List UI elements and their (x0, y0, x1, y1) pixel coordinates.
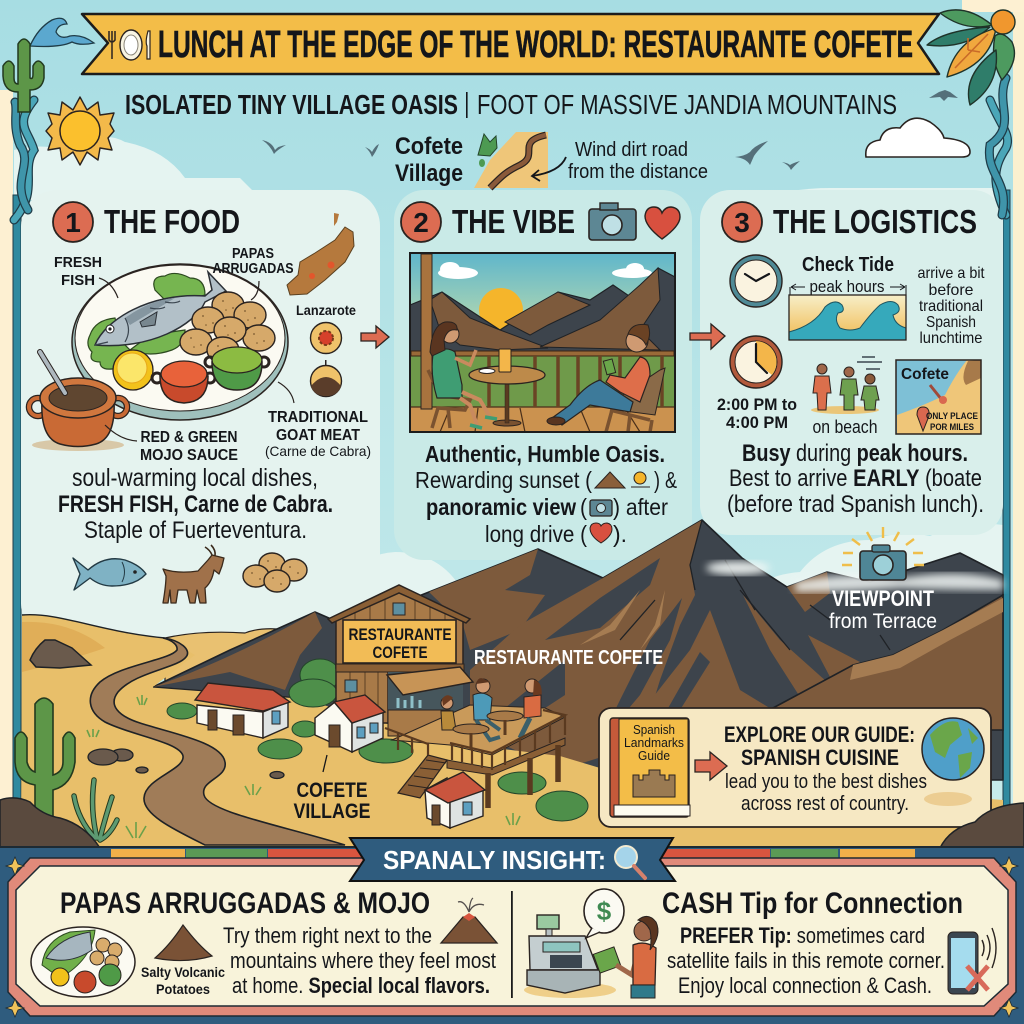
heading: the logistics (722, 202, 977, 242)
ribbon: spanaly insight (350, 838, 675, 881)
icon: birds (262, 90, 958, 170)
icon: camera (589, 203, 636, 240)
text: insight right body: Enjoy local connection & Cash. (678, 973, 932, 998)
icon: viewpoint camera (842, 527, 924, 580)
label: cofete village: COFETE (296, 779, 368, 802)
house 2 (315, 695, 385, 752)
icon: guide book: Spanish (633, 722, 675, 737)
icon: volcanic salt pile (155, 925, 212, 961)
illustration: tide waves (789, 295, 906, 340)
subtitle: ISOLATED TINY VILLAGE OASIS (125, 89, 458, 120)
heading: the food: 1 (65, 207, 81, 238)
label: viewpoint (829, 586, 937, 633)
icon: sun (46, 97, 114, 165)
icon: chili medallion (310, 322, 342, 354)
heading: cash tip: CASH Tip for Connection (662, 887, 963, 920)
icon: people on beach (811, 357, 882, 414)
location caption: Cofete Village: Village (395, 160, 463, 187)
icon: clock (730, 255, 782, 307)
text: vibe description: ( (580, 494, 587, 520)
guide text: lead you to the best dishes (725, 771, 927, 793)
guide text: EXPLORE OUR GUIDE: (724, 722, 915, 747)
text: arrive a bit: lunchtime (920, 330, 983, 347)
arrow: food to vibe (361, 326, 389, 348)
text: logistics description: Busy during peak hours. (742, 440, 968, 467)
restaurant building: COFETE (372, 643, 428, 662)
panel: explore our guide (599, 708, 991, 827)
text: vibe description: ) & (654, 467, 677, 493)
panel: the vibe background (394, 190, 692, 560)
label: cofete village (294, 755, 370, 823)
text: insight left body: at home. Special local flavors. (232, 973, 490, 998)
heading: the logistics: 3 (734, 207, 750, 238)
text: food description: FRESH FISH, Carne de Cabra. (58, 491, 333, 518)
illustration: map of Cofete: Cofete (901, 366, 949, 383)
insight frame (8, 858, 1016, 1016)
location caption: Cofete Village (395, 133, 463, 187)
panel: the food background (21, 190, 380, 640)
guide text: across rest of country. (741, 793, 909, 815)
label: salty volcanic potatoes: Potatoes (156, 981, 210, 997)
location caption: Cofete Village: Cofete (395, 133, 463, 160)
heading: the food: THE FOOD (104, 203, 240, 240)
house 1 (195, 683, 290, 738)
icon: cactus top left (3, 39, 44, 112)
rocks: mid left (88, 749, 284, 778)
caption: wind dirt road: Wind dirt road (575, 139, 688, 161)
text: vibe description: ) after (613, 494, 668, 520)
label: salty volcanic potatoes (141, 964, 225, 997)
panel: 2 the vibe (401, 202, 680, 547)
labels: food callouts: FRESH (54, 254, 102, 271)
illustration: restaurant and village (167, 585, 588, 828)
labels: food callouts: FISH (61, 272, 95, 289)
grass tufts (87, 695, 520, 838)
icon: cash register (524, 915, 616, 998)
labels: food callouts: (Carne de Cabra) (265, 443, 371, 459)
text: food description: soul-warming local dishes, (72, 464, 318, 492)
rock: left dune (30, 640, 91, 668)
background clouds (14, 137, 1003, 620)
text: vibe description: long drive ( (485, 521, 587, 547)
icon: guide book (610, 718, 690, 817)
heading: papas arrugadas: PAPAS ARRUGGADAS & MOJO (60, 887, 430, 920)
subtitle: FOOT OF MASSIVE JANDIA MOUNTAINS (477, 89, 897, 120)
text: vibe description: panoramic view (426, 494, 576, 520)
text: food description (58, 464, 333, 544)
arrow to road (532, 157, 566, 181)
text: vibe description: Rewarding sunset ( (415, 467, 592, 493)
icon: phone no signal (948, 928, 996, 994)
icon: inline sunset (595, 472, 650, 488)
labels: food callouts (54, 245, 371, 464)
icon: cloud top right (866, 118, 970, 157)
label: viewpoint: from Terrace (829, 610, 937, 633)
icon: guide book: Landmarks (624, 735, 684, 750)
heading: the vibe (401, 202, 575, 242)
icon: desert plant (74, 780, 117, 840)
title banner (82, 14, 939, 74)
label: time range (717, 395, 797, 432)
text: insight right body: satellite fails in this remote corner. (667, 948, 945, 973)
divider (511, 891, 513, 998)
labels: food callouts: TRADITIONAL (268, 409, 368, 426)
arrow: vibe to logistics (690, 324, 725, 349)
restaurant building: RESTAURANTE (348, 625, 452, 644)
text: insight left body: Try them right next to the (223, 923, 432, 948)
arrow: to guide text (695, 752, 727, 780)
illustration: plate of fish and potatoes (72, 264, 288, 420)
icon: fish (73, 558, 146, 590)
icon: speech bubble with dollar (584, 889, 624, 938)
icon: guide book: Guide (638, 748, 670, 763)
heading: the food (53, 202, 240, 242)
house 3 (425, 772, 485, 828)
icon: cactus bottom left (15, 698, 75, 818)
restaurant building (328, 585, 473, 736)
icon: winding road map (474, 132, 548, 188)
icon: potatoes (243, 553, 307, 592)
icon: inline camera (590, 500, 612, 516)
photo: terrace view at sunset (410, 253, 675, 432)
icon: speech bubble with dollar: $ (597, 896, 612, 926)
text: insight right body (667, 923, 945, 998)
icon: plate and cutlery (109, 30, 150, 60)
text: logistics description (727, 440, 984, 518)
text: vibe description (415, 441, 677, 547)
heading: the logistics: THE LOGISTICS (773, 203, 977, 240)
panel: insight footer (0, 838, 1024, 1024)
vines: right side (989, 78, 1008, 215)
labels: food callouts: PAPAS (232, 245, 274, 262)
road (90, 638, 345, 845)
vines: left side (14, 100, 34, 220)
icon: leaves and orange top right (927, 10, 1015, 105)
corner stars (6, 857, 1018, 1017)
shrubs (167, 659, 588, 821)
icon: volcanic soil medallion (310, 360, 342, 396)
text: vibe description: Authentic, Humble Oasis. (425, 441, 665, 467)
text: arrive a bit: traditional (919, 298, 983, 315)
panel: 1 the food (29, 202, 371, 603)
heading: the vibe: THE VIBE (452, 203, 575, 240)
text: insight left body: mountains where they feel most (230, 948, 496, 973)
labels: food callouts: MOJO SAUCE (140, 447, 238, 464)
icon: goat (163, 545, 224, 603)
icon: mini plate (31, 927, 135, 997)
icon: heart (645, 207, 680, 239)
labels: food callouts: GOAT MEAT (276, 427, 360, 444)
heading: the vibe: 2 (413, 207, 429, 238)
illustration: map of Cofete: ONLY PLACE (926, 411, 978, 422)
labels: food callouts: ARRUGADAS (212, 260, 294, 277)
label: check tide: Check Tide (802, 254, 894, 276)
icon: magnifier (615, 846, 645, 878)
label: peak hours: peak hours (810, 277, 884, 296)
illustration: map of Cofete (896, 360, 981, 434)
label: time range: 4:00 PM (726, 413, 788, 432)
icon: inline heart (590, 523, 612, 543)
label: time range: 2:00 PM to (717, 395, 797, 414)
label: viewpoint: VIEWPOINT (832, 586, 934, 611)
text: arrive a bit: before (928, 282, 974, 299)
label: restaurante cofete: RESTAURANTE COFETE (474, 647, 663, 669)
text: arrive a bit: Spanish (926, 314, 976, 331)
caption: wind dirt road: from the distance (568, 161, 708, 183)
icon: sea wave top left (30, 18, 94, 46)
deck with diners (385, 678, 565, 808)
guide text: SPANISH CUISINE (741, 745, 899, 770)
icon: rocks bottom right (940, 803, 1024, 848)
text: insight left body (223, 923, 496, 998)
text: logistics description: Best to arrive EARLY (boate (729, 465, 982, 492)
icon: rocks bottom left (0, 798, 100, 848)
text: arrive a bit (918, 265, 985, 347)
icon: clock 2 to 4 pm (730, 336, 782, 388)
illustration: map of Cofete: POR MILES (930, 422, 974, 433)
label: cofete village: VILLAGE (294, 800, 370, 823)
decorative stripe (111, 849, 915, 858)
side frame (13, 190, 1010, 835)
map: Lanzarote (287, 213, 354, 295)
caption: wind dirt road (568, 139, 708, 183)
icon: volcano (441, 898, 497, 943)
landscape: mountains and desert (21, 520, 1003, 850)
ribbon: spanaly insight: SPANALY INSIGHT: (383, 845, 606, 875)
label: on beach: on beach (812, 417, 878, 437)
text: logistics description: (before trad Spanish lunch). (727, 491, 984, 518)
label: Lanzarote: Lanzarote (296, 302, 356, 318)
icon: person paying with cash (593, 916, 658, 998)
text: food description: Staple of Fuerteventura. (84, 517, 307, 544)
text: arrive a bit: arrive a bit (918, 265, 985, 282)
illustration: clay pot of goat stew (29, 352, 127, 451)
text: insight right body: PREFER Tip: sometimes card (680, 923, 925, 948)
labels: food callouts: RED & GREEN (140, 429, 238, 446)
subtitle (125, 89, 897, 120)
text: vibe description: ). (613, 521, 627, 547)
icon: globe (922, 718, 984, 780)
panel: 3 the logistics (717, 202, 985, 518)
guide text (724, 722, 927, 815)
panel: the logistics background (700, 190, 1003, 535)
label: salty volcanic potatoes: Salty Volcanic (141, 964, 225, 980)
